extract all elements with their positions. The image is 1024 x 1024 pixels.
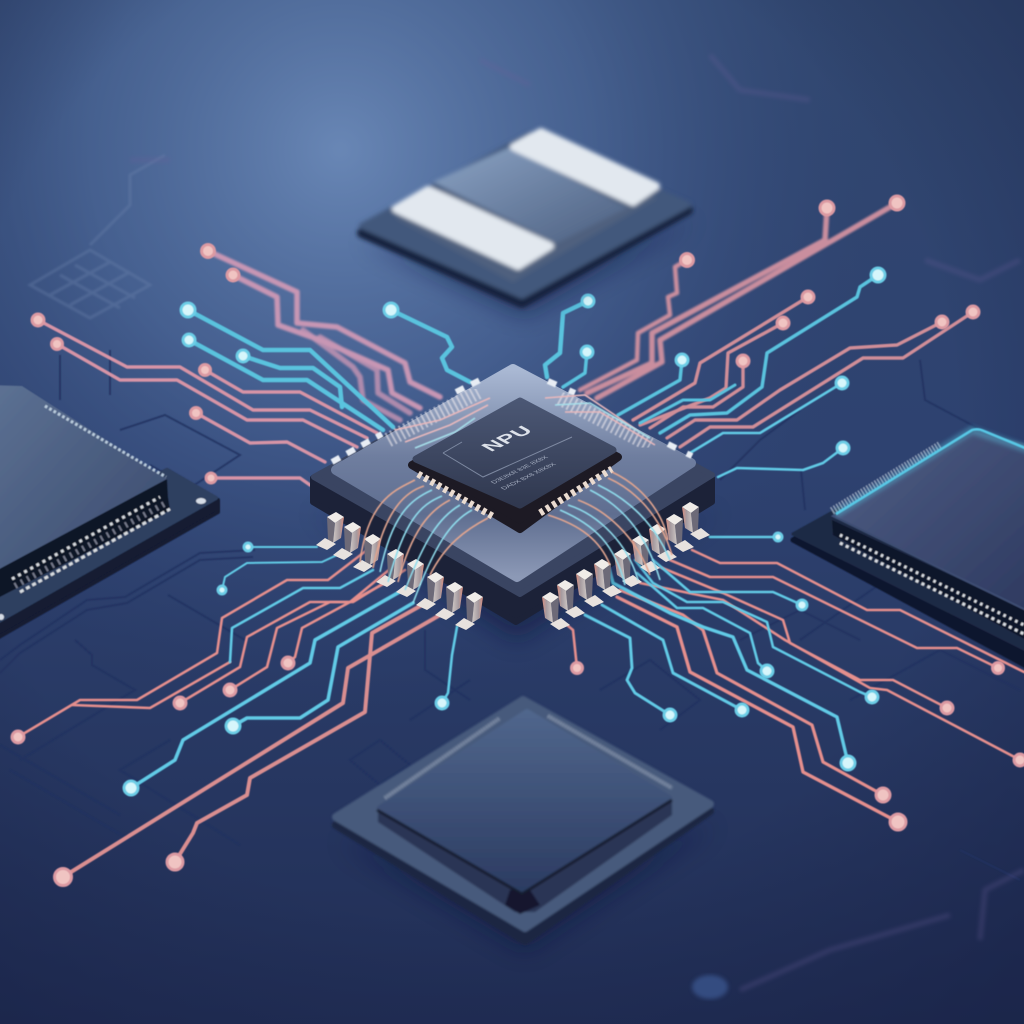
wire bonds lower right — [548, 472, 672, 585]
trace end nodes cyan — [124, 268, 885, 795]
glow dot bottom — [692, 975, 728, 999]
faint background circuits, dark — [0, 350, 1020, 880]
chip: bottom module — [336, 700, 710, 941]
die microtext: D3E8XR 83E 8X8X — [490, 455, 551, 485]
wire bonds lower left — [360, 480, 488, 603]
package base sides — [313, 478, 712, 622]
chip: left processor — [0, 385, 218, 642]
contact pads upper edges — [332, 380, 692, 462]
legs lower right — [542, 502, 710, 630]
NPU die side wall — [412, 405, 618, 529]
wire band upper left — [388, 392, 490, 448]
white dots row — [45, 406, 166, 477]
legs lower left — [316, 512, 483, 630]
trace end nodes pink — [12, 196, 1024, 886]
package top face — [336, 369, 691, 577]
NPU die pins lower right — [540, 469, 612, 513]
NPU die pins lower left — [418, 474, 494, 517]
chip: right processor — [793, 429, 1024, 668]
far traces, blurred pink — [208, 203, 897, 420]
lower pink traces — [18, 540, 1024, 822]
mid traces pink — [38, 297, 973, 485]
die markings — [443, 437, 572, 477]
chip: central package — [313, 369, 712, 630]
faint background circuits, upper light — [30, 155, 165, 318]
wire band upper right — [545, 395, 655, 445]
chip: top memory module — [362, 132, 688, 303]
NPU die top face — [416, 401, 613, 505]
die microtext: DADX BX8 X8X8X — [500, 462, 559, 491]
mid and lower cyan traces — [131, 383, 872, 788]
NPU label: NPU — [477, 424, 538, 454]
faint purple glows — [130, 55, 1024, 990]
chip shadows — [310, 220, 720, 950]
package base ledge — [314, 430, 712, 594]
pins — [12, 497, 160, 579]
near pink traces — [63, 605, 440, 877]
far cyan traces — [188, 275, 878, 433]
